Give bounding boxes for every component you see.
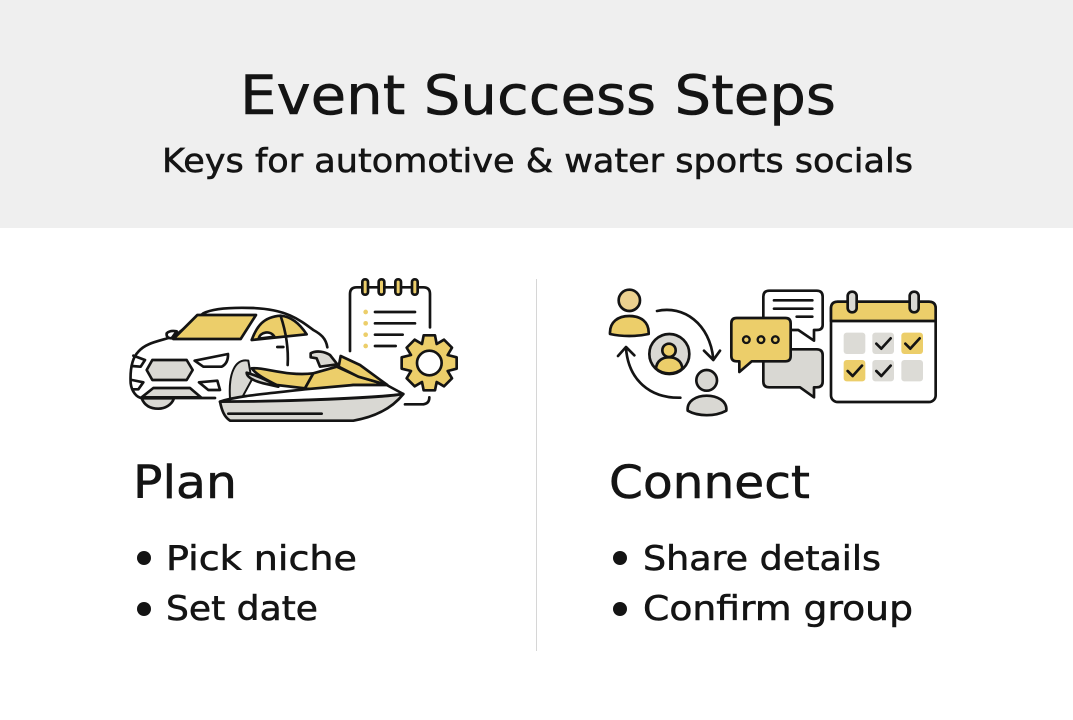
- icon: chat bubbles: [731, 291, 823, 397]
- icon: car: [131, 308, 327, 409]
- icon: car, jet ski, checklist and gear: [131, 279, 457, 421]
- icon: jet ski: [220, 352, 403, 421]
- heading: connect: Connect: [609, 456, 810, 509]
- title: Event Success Steps: [240, 64, 836, 127]
- icon: calendar: [831, 292, 936, 402]
- icon: checklist: [350, 279, 430, 404]
- heading: plan: Plan: [133, 456, 237, 509]
- list: connect bullets: [613, 539, 913, 629]
- list: plan bullets: [137, 539, 357, 629]
- subtitle: Keys for automotive & water sports socials: [162, 141, 913, 180]
- icon: people, chat bubbles and calendar: [610, 290, 936, 415]
- icon: people cycle: [610, 290, 726, 415]
- list: connect bullets: Confirm group: [643, 589, 913, 629]
- list: plan bullets: Set date: [166, 589, 318, 629]
- panel: plan: [131, 279, 457, 629]
- list: connect bullets: Share details: [643, 539, 881, 579]
- header panel: [0, 0, 1073, 228]
- list: plan bullets: Pick niche: [166, 539, 357, 579]
- icon: gear: [402, 335, 457, 390]
- panel: connect: [609, 290, 936, 629]
